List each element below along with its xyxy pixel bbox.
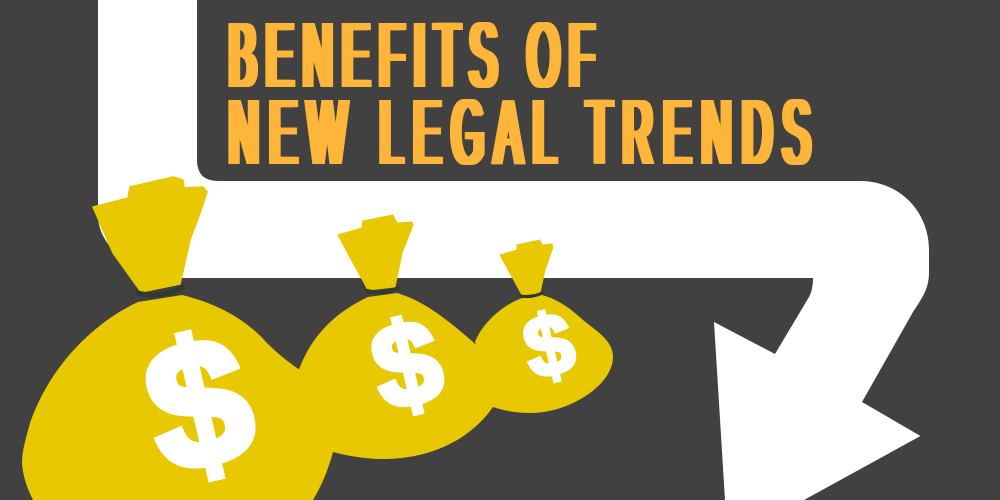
icon: medium money bag [298, 215, 510, 459]
title [228, 3, 821, 184]
dollar sign: $ [360, 293, 454, 437]
title line 2: NEW LEGAL TRENDS [229, 80, 821, 184]
icon: small money bag [475, 240, 613, 413]
dollar sign: $ [515, 294, 583, 398]
icon: large money bag [22, 177, 338, 500]
title line 1: BENEFITS OF [229, 3, 604, 107]
